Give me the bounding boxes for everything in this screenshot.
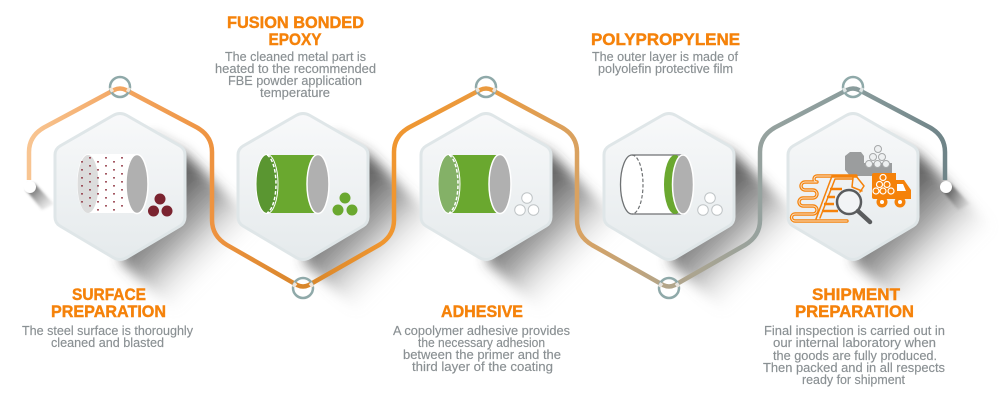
step 2 text: fusion bonded epoxy: FBE powder application: [228, 74, 362, 88]
step 5 text: shipment preparation: Then packed and in all respects: [763, 361, 945, 375]
icon: green pellets: [332, 192, 358, 216]
step 5 text: shipment preparation: ready for shipment: [802, 373, 906, 387]
icon: epoxy pipe: [256, 154, 329, 214]
connector line: [29, 88, 945, 286]
end cap: [940, 181, 970, 210]
step 3 text: adhesive: third layer of the coating: [412, 360, 553, 374]
step 5 text: shipment preparation: [763, 285, 945, 387]
hexagon 1: surface preparation: [55, 114, 185, 260]
hexagon 5: shipment preparation: [788, 114, 918, 260]
hexagon 2: fusion bonded epoxy: [238, 114, 368, 260]
icon: red pellets: [148, 194, 172, 216]
step 5 text: shipment preparation: our internal laboratory when: [773, 336, 936, 350]
step 4 text: polypropylene: The outer layer is made of: [592, 50, 739, 64]
icon: blasted steel pipe: [77, 154, 148, 214]
icon: polypropylene pipe: [620, 155, 694, 214]
step 1 text: surface preparation: cleaned and blasted: [51, 336, 164, 350]
start cap: [24, 181, 54, 210]
step 1 text: surface preparation: [22, 285, 194, 350]
step 2 text: fusion bonded epoxy: FUSION BONDED: [227, 13, 364, 32]
ring 1: [110, 77, 130, 97]
step 5 text: shipment preparation: the goods are fully produced.: [773, 349, 937, 363]
ring 5: [843, 77, 863, 97]
step 2 text: fusion bonded epoxy: temperature: [260, 86, 330, 100]
icon: document squiggle: [792, 176, 864, 221]
step 5 text: shipment preparation: SHIPMENT: [812, 285, 901, 304]
icon: white pellets: [698, 193, 722, 215]
step 2 text: fusion bonded epoxy: The cleaned metal part is: [225, 50, 366, 64]
hexagon 4: polypropylene: [604, 114, 734, 260]
step 4 text: polypropylene: [591, 30, 740, 76]
ring 4: [659, 278, 679, 298]
step 3 text: adhesive: the necessary adhesion: [418, 336, 545, 350]
icon: magnifier: [837, 190, 870, 222]
icon: adhesive pipe: [438, 154, 511, 214]
step 2 text: fusion bonded epoxy: [215, 13, 376, 100]
step 5 text: shipment preparation: Final inspection is carried out in: [764, 324, 945, 338]
step 1 text: surface preparation: The steel surface is thoroughly: [22, 324, 194, 338]
hexagon 3: adhesive: [421, 114, 551, 260]
hexagon shadows: [120, 135, 995, 335]
step 3 text: adhesive: A copolymer adhesive provides: [393, 324, 570, 338]
step 2 text: fusion bonded epoxy: heated to the recommended: [215, 62, 376, 76]
step 4 text: polypropylene: polyolefin protective film: [598, 62, 733, 76]
step 2 text: fusion bonded epoxy: EPOXY: [268, 30, 322, 49]
step 5 text: shipment preparation: PREPARATION: [795, 302, 914, 321]
ring 2: [293, 278, 313, 298]
icon: ship: [845, 146, 892, 176]
step 1 text: surface preparation: PREPARATION: [51, 302, 166, 321]
step 3 text: adhesive: [393, 302, 570, 374]
icon: white pellets: [515, 193, 539, 215]
step 4 text: polypropylene: POLYPROPYLENE: [591, 30, 740, 49]
ring 3: [476, 77, 496, 97]
step 1 text: surface preparation: SURFACE: [72, 285, 146, 304]
step 3 text: adhesive: between the primer and the: [403, 348, 561, 362]
icon: truck: [872, 173, 911, 208]
step 3 text: adhesive: ADHESIVE: [441, 302, 523, 321]
